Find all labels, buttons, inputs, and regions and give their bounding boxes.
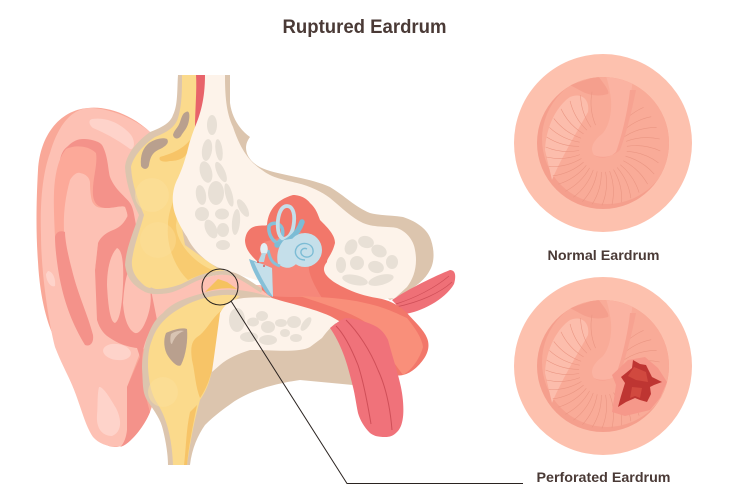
ear top highlight: [89, 119, 134, 149]
magnifier circle and leader line: [202, 269, 523, 484]
eardrum location in canal: [205, 279, 237, 292]
ear lobe highlights: [102, 342, 132, 362]
ear canal: [150, 285, 270, 320]
cartilage pocket lower: [164, 328, 187, 366]
upper temporal bone: white: [173, 75, 416, 300]
tube lighter band: [300, 296, 423, 375]
canal pink lining: [185, 274, 272, 298]
ear dark folds: [60, 139, 157, 447]
panel: normal eardrum: [514, 54, 692, 232]
ear dark strip: [55, 231, 93, 346]
malleus handle: [592, 76, 633, 158]
upper temporal bone: tan outline: [125, 75, 225, 294]
canal upper band: [150, 273, 262, 292]
cavity lighter floor: [258, 232, 322, 298]
label: perforated eardrum: Perforated Eardrum: [536, 469, 670, 485]
title: Ruptured Eardrum: [282, 17, 446, 38]
ear island: [64, 173, 127, 270]
outer ear: [36, 108, 190, 447]
lower tan bone: [142, 290, 353, 465]
lower pink muscle strap: [330, 318, 403, 437]
label: normal eardrum: Normal Eardrum: [548, 247, 660, 263]
lower temporal bone: white: [212, 297, 345, 372]
middle ear cavity and eustachian tube: [245, 195, 428, 376]
skull tan band right: [225, 75, 434, 300]
inner ear: semicircular canals and cochlea: [268, 206, 322, 268]
ear antihelix: [54, 146, 127, 262]
red muscle strip at top: [195, 75, 206, 128]
ear tongues: [107, 248, 123, 323]
panel: perforated eardrum: [514, 277, 692, 455]
upper yellow tissue: [131, 75, 228, 289]
ossicles and eardrum bones: [249, 243, 273, 297]
perforation: [612, 357, 667, 416]
bone cells upper: [194, 115, 398, 288]
lower yellow tissue: [148, 295, 240, 465]
cartilage pockets: [141, 138, 168, 169]
malleus handle: [592, 299, 633, 381]
upper right thin muscle: [392, 270, 455, 314]
